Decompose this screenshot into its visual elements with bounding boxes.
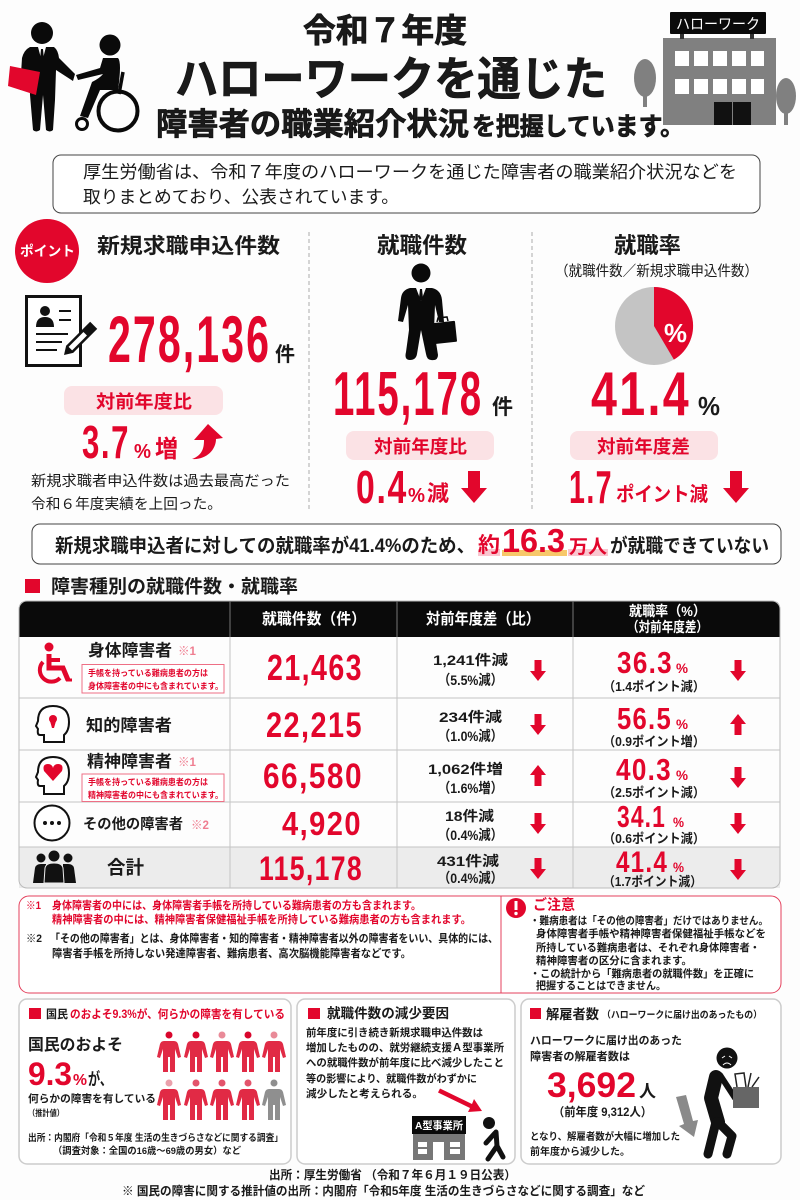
row: mental disability: （2.5ポイント減） [603,785,705,800]
change value: % [408,485,425,507]
change value: 増 [155,436,178,463]
row: mental disability: 66,580 [263,757,363,796]
row: intellectual disability: 知的障害者 [86,716,172,735]
change value [569,461,708,513]
note box: 精神障害者の中にも含まれています。 [88,790,223,800]
section heading: 障害種別の就職件数・就職率 [51,576,298,597]
caution text: 所持している難病患者は、それぞれ身体障害者・ [536,941,760,954]
icon: speech dots [34,806,70,840]
row: physical disability [40,641,746,694]
row: total: （1.7ポイント減） [603,874,702,889]
row: other disability: % [673,814,684,830]
row: other disability: （0.6ポイント減） [603,831,705,846]
icon: Hello Work building: ハローワーク [676,16,760,33]
unit: % [698,391,720,421]
pie chart [615,287,693,365]
panel: dismissals [521,999,781,1164]
icon: walking person [483,1117,503,1159]
panel heading: のおよそ9.3%が、何らかの障害を有している [70,1007,285,1021]
row: other disability: 4,920 [282,805,362,842]
row: mental disability: 精神障害者 [87,752,172,771]
row: physical disability: 1,241件減 [433,652,508,668]
icon: group of people [33,850,76,883]
source footer: 出所：厚生労働省 （令和７年６月１９日公表） [269,1167,516,1182]
panel heading: 就職件数の減少要因 [327,1005,449,1021]
title: を把握しています。 [472,113,684,141]
source footer: ※ 国民の障害に関する推計値の出所：内閣府「令和5年度 生活の生きづらさなどに関する調査」など [122,1183,645,1198]
source: 出所：内閣府「令和５年度 生活の生きづらさなどに関する調査」 [28,1132,283,1144]
heading: 就職率 [614,233,681,258]
footnote 1: 精神障害者の中には、精神障害者保健福祉手帳を所持している難病患者の方も含まれます。 [52,912,471,926]
row: other disability: （0.4%減） [438,827,503,843]
year on year label: 対前年度差 [597,436,690,457]
panel heading [530,1006,762,1022]
icon: type A workplace [412,1116,466,1160]
icon: head with bulb [36,706,69,742]
row: physical disability: （1.4ポイント減） [603,679,705,694]
value: 115,178 [333,360,483,429]
table header: 就職件数（件） [262,610,366,628]
unit: 件 [492,396,513,419]
row: intellectual disability: 234件減 [439,709,502,725]
caution text: 身体障害者手帳や精神障害者保健福祉手帳などを [536,927,766,940]
row: other disability: 18件減 [445,808,494,824]
icon: head with heart [36,757,69,794]
change value: ポイント減 [616,482,708,506]
arrow [438,1088,482,1112]
row: mental disability: 40.3 [616,752,672,787]
panel heading: 解雇者数 [546,1006,599,1022]
callout: 約 [478,534,500,557]
row: physical disability: 36.3 [617,645,673,680]
row: physical disability: 身体障害者 [88,641,172,660]
main statement: 9.3 [28,1056,72,1092]
title [156,12,684,142]
callout: が就職できていない [610,534,769,557]
note box: 手帳を持っている難病患者の方は [88,668,208,678]
icon: type A workplace: A型事業所 [415,1119,463,1132]
main statement [28,1036,156,1118]
callout: 新規求職申込者に対しての就職率が41.4%のため、 [55,534,475,557]
value: 41.4 [591,360,691,429]
icon: dismissed person [708,1048,759,1154]
year on year label [570,431,718,460]
row: physical disability: % [676,660,689,676]
row: other disability: その他の障害者 [83,816,183,833]
intro box [53,155,760,213]
row: physical disability: （5.5%減） [438,672,503,688]
change value: 1.7 [569,461,613,513]
note box: 身体障害者の中にも含まれています。 [88,681,223,691]
body text: への就職件数が前年度に比べ減少したこと [306,1056,504,1069]
table header [262,603,708,635]
note box: 手帳を持っている難病患者の方は [88,777,208,787]
unit: 人 [639,1082,656,1101]
icon: businessman [398,264,457,360]
footnote 1: 身体障害者の中には、身体障害者手帳を所持している難病患者の方も含まれます。 [52,898,421,912]
caution text: ・この統計から「難病患者の就職件数」を正確に [530,967,754,980]
formula note: （就職件数／新規求職申込件数） [555,263,758,280]
caution text: ・難病患者は「その他の障害者」だけではありません。 [530,914,768,927]
footnote 2: 障害者手帳を所持しない発達障害者、難病患者、高次脳機能障害者などです。 [52,946,411,960]
row: intellectual disability: % [676,716,689,732]
table header: 対前年度差（比） [426,609,540,628]
body text [306,1026,504,1100]
table [19,601,780,889]
footnote 2 [26,931,498,960]
icon: form and pencil [26,296,97,366]
row: other disability: 34.1 [617,799,666,834]
main statement: が、 [88,1069,112,1089]
footnote 2: 「その他の障害者」とは、身体障害者・知的障害者・精神障害者以外の障害者をいい、具体的には、 [50,931,498,945]
row: total: 115,178 [259,850,363,888]
panel: new job applications [15,219,295,513]
icon: up arrow [192,424,223,459]
source footer [122,1167,645,1198]
footnote 1: ※1 [26,900,41,912]
panel: footnotes and caution [19,896,781,993]
lead text: ハローワークに届け出のあった [530,1034,682,1047]
row: mental disability: （1.6%増） [438,780,503,796]
table header: 就職率（%） [629,603,706,619]
callout: 万人 [569,537,607,558]
row: mental disability: 1,062件増 [428,761,503,777]
title: 令和７年度 [303,12,467,49]
main statement: （推計値） [28,1108,64,1118]
year on year label: 対前年度比 [96,391,192,412]
gray arrow [676,1095,698,1137]
row: other disability: ※2 [191,818,209,832]
row: total: 41.4 [616,846,668,879]
row: intellectual disability: （0.9ポイント増） [603,734,705,749]
main statement: % [73,1072,87,1089]
previous year: （前年度 9,312人） [553,1104,652,1119]
row: mental disability [36,752,746,802]
row: mental disability: ※1 [178,755,196,769]
panel: reasons for decrease [297,999,515,1164]
caution text [530,914,768,992]
year on year label: 対前年度比 [374,436,467,457]
row: total: 合計 [107,857,144,878]
unit: 件 [275,343,295,366]
caution text: 把握することはできません。 [536,979,666,992]
closing text [530,1130,680,1158]
main statement: 国民のおよそ [28,1036,123,1054]
panel: placement rate [555,233,758,513]
heading: 新規求職申込件数 [97,235,280,258]
row: total [33,846,746,889]
body text: 増加したものの、就労継続支援Ａ型事業所 [306,1041,504,1054]
change value: 0.4 [356,461,408,513]
row: physical disability: 21,463 [267,647,363,688]
panel: 9.3 percent of population [19,999,291,1164]
description [31,473,290,513]
year on year label [64,386,223,415]
description: 新規求職者申込件数は過去最高だった [31,473,290,490]
footnote 1 [26,898,471,926]
point badge [15,219,79,283]
source [28,1132,283,1157]
main statement: 何らかの障害を有している [28,1092,156,1105]
callout [32,522,781,564]
note box [82,664,224,693]
title: ハローワークを通じた [175,53,607,105]
closing text: 前年度から減少した。 [530,1145,630,1158]
row: intellectual disability: 22,215 [266,706,363,745]
icon: down arrow [723,471,749,503]
lead text [530,1034,682,1063]
callout: 16.3 [502,522,565,559]
row: total: 431件減 [437,853,499,869]
change value: 3.7 [82,416,130,468]
icon: down arrow [461,471,487,503]
pictogram: 10 people [157,1032,286,1120]
value: 3,692 [547,1066,636,1105]
body text: 前年度に引き続き新規求職申込件数は [306,1026,483,1039]
pie chart: % [664,318,687,348]
row: physical disability: ※1 [178,644,196,658]
change value: 減 [427,481,449,506]
caution heading: ご注意 [533,896,575,914]
icon: staff and wheelchair user [8,22,138,132]
note box [82,774,224,802]
panel heading: 国民 [46,1008,68,1021]
change value: % [134,441,151,463]
row: intellectual disability [36,701,746,749]
body text: 減少したと考えられる。 [306,1087,423,1100]
description: 令和６年度実績を上回った。 [31,496,222,513]
row: intellectual disability: 56.5 [617,701,672,736]
row: total: （0.4%減） [438,870,503,886]
heading: 就職件数 [377,233,467,258]
lead text: 障害者の解雇者数は [530,1049,630,1063]
panel heading: （ハローワークに届け出のあったもの） [602,1009,762,1021]
footnote 2: ※2 [26,933,42,945]
row: total: % [673,859,684,875]
intro box: 取りまとめており、公表されています。 [83,187,399,207]
closing text: となり、解雇者数が大幅に増加した [530,1130,680,1143]
icon: Hello Work building [634,12,796,125]
table header: （対前年度差） [627,619,708,635]
panel: job placements [333,233,513,513]
year on year label [346,431,494,460]
row: intellectual disability: （1.0%減） [438,728,503,744]
caution text: 精神障害者の区分に含まれます。 [536,954,692,967]
body text: 等の影響により、就職件数がわずかに [306,1072,477,1085]
panel heading [29,1007,285,1021]
row: other disability [34,799,746,846]
caution heading [506,896,575,918]
value: 278,136 [108,302,271,376]
intro box: 厚生労働省は、令和７年度のハローワークを通じた障害者の職業紹介状況などを [83,162,737,182]
row: mental disability: % [676,767,689,783]
title: 障害者の職業紹介状況 [156,107,469,142]
point badge: ポイント [20,243,75,259]
source: （調査対象：全国の16歳～69歳の男女）など [53,1145,241,1157]
icon: wheelchair [40,642,72,682]
